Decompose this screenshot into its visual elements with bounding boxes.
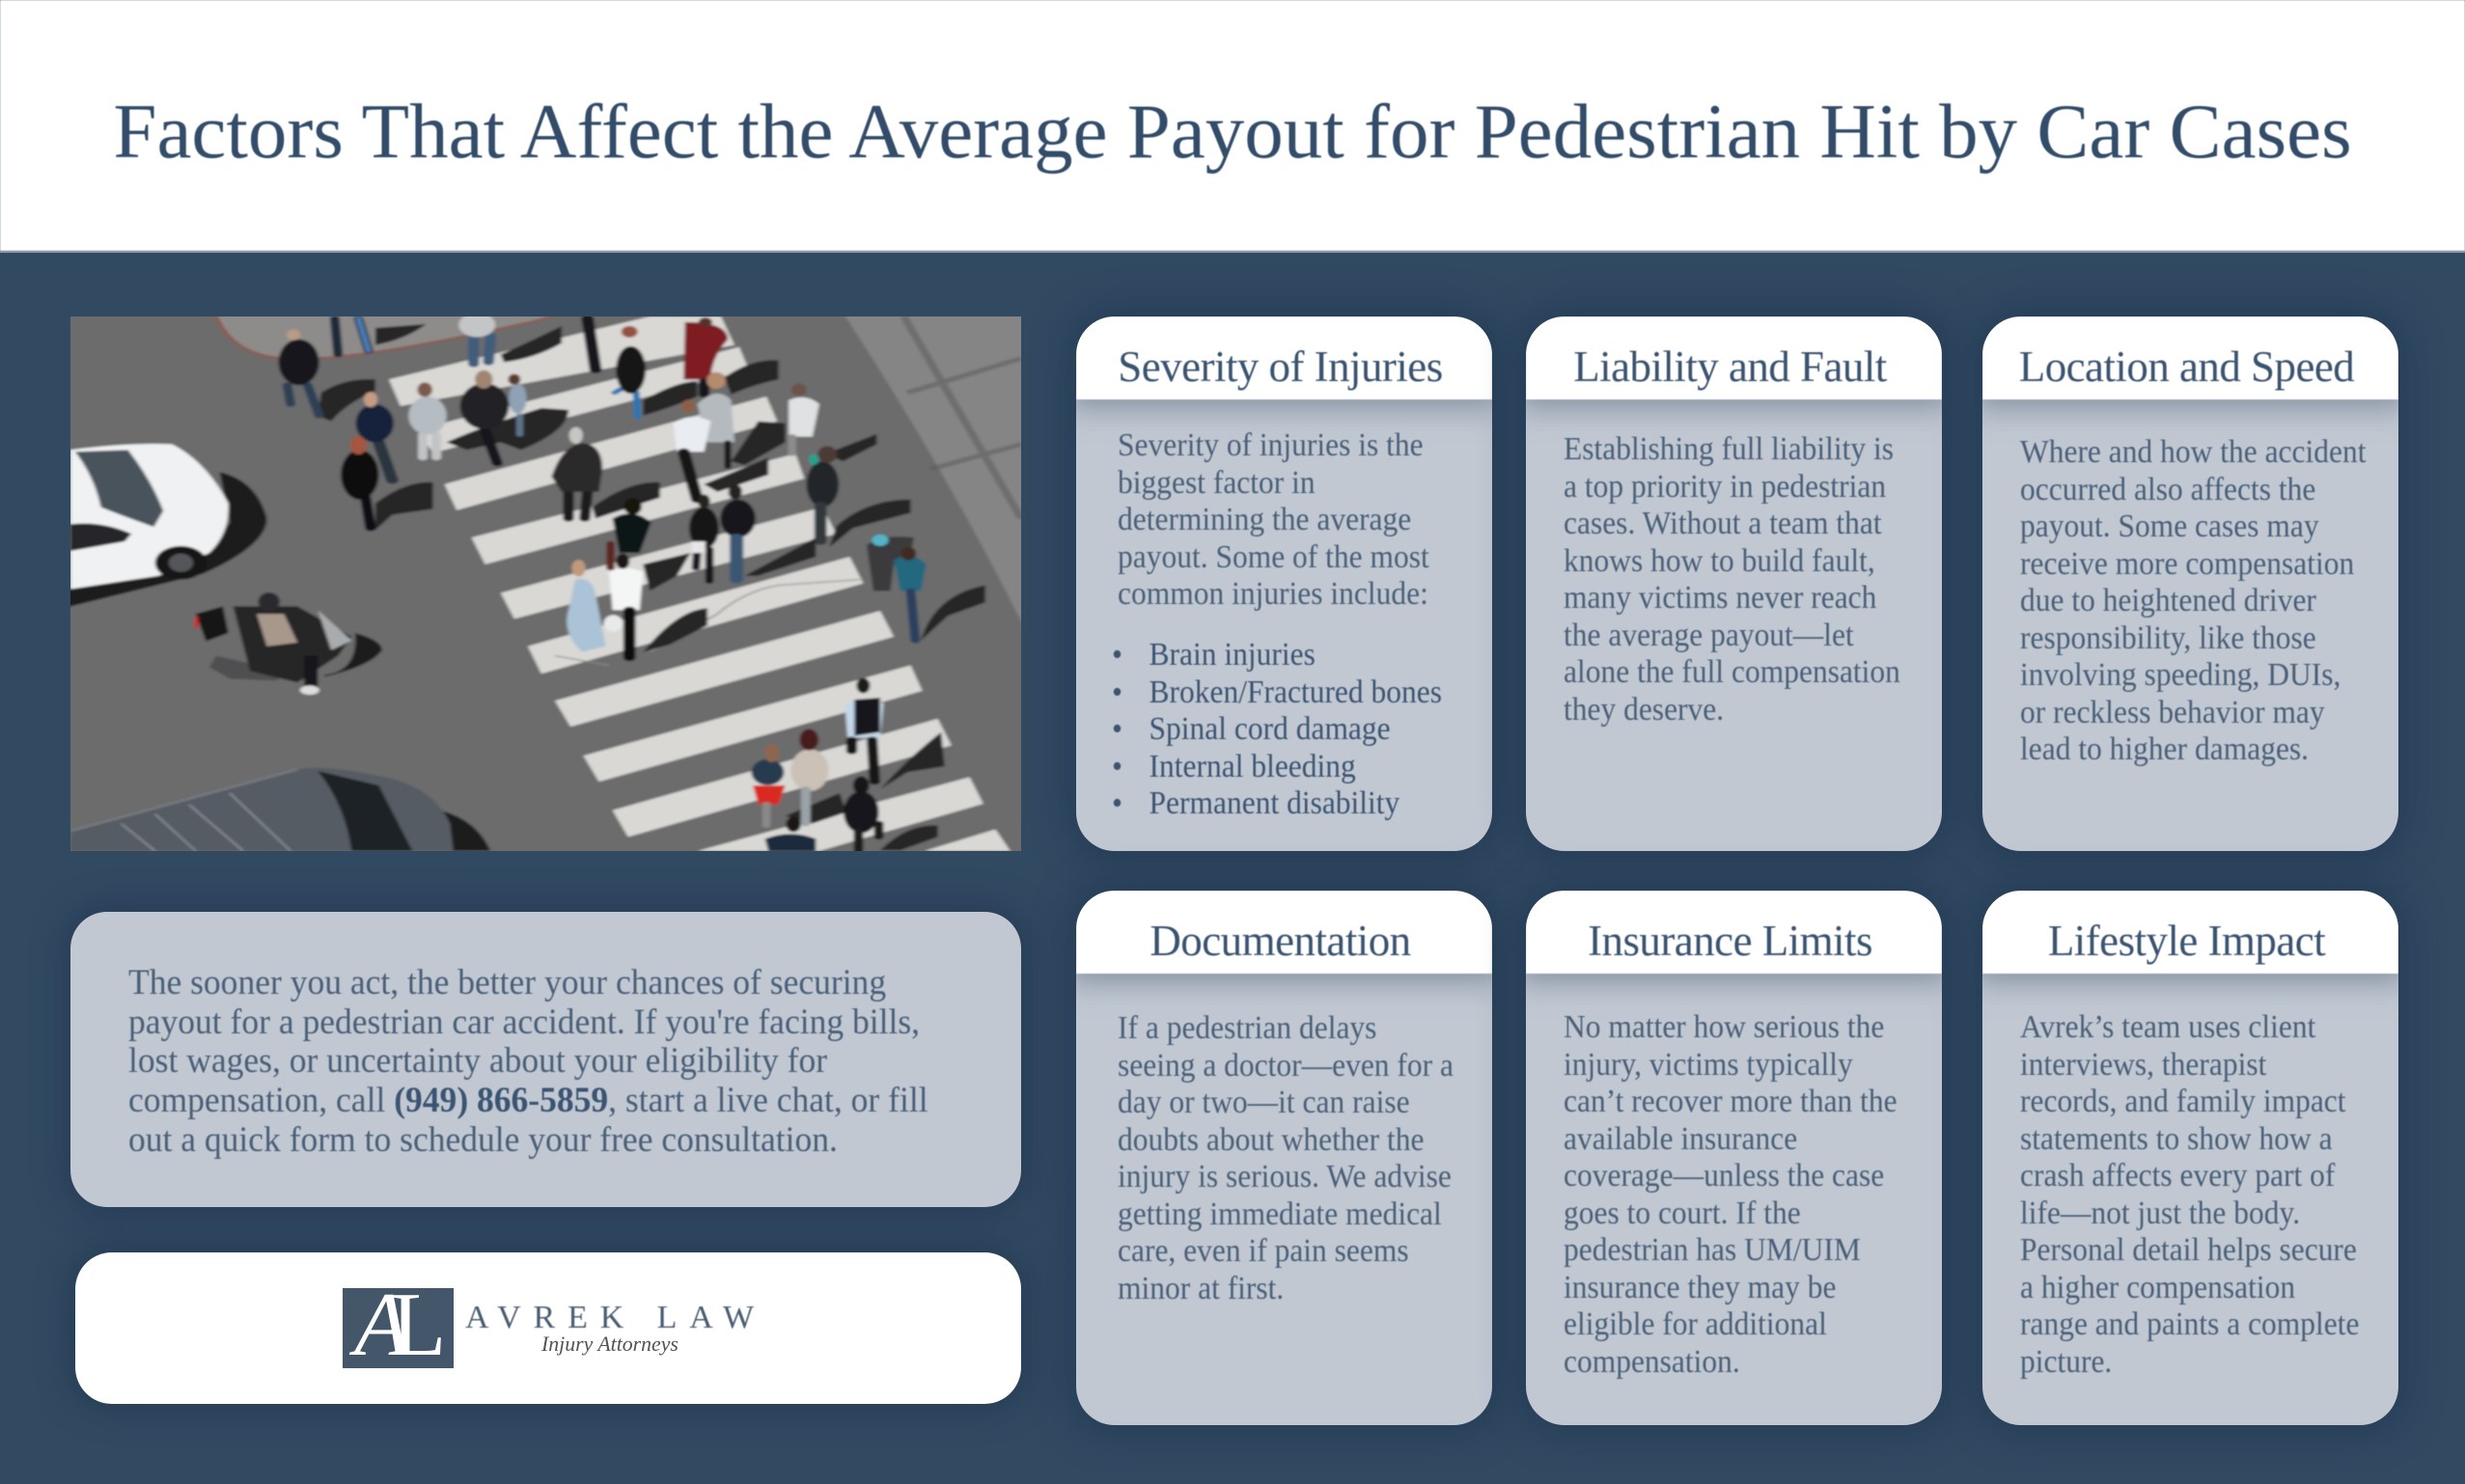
heading: Location and Speed [2019,343,2354,391]
body text: care, even if pain seems [1118,1233,1409,1269]
injury list: • [1112,673,1122,710]
body text: cases. Without a team that [1564,506,1882,541]
body text: statements to show how a [2020,1121,2333,1156]
body text: injury is serious. We advise [1118,1159,1452,1195]
body text: picture. [2020,1343,2112,1380]
body text: eligible for additional [1564,1306,1827,1342]
body text: life—not just the body. [2020,1195,2300,1231]
body text: lead to higher damages. [2020,731,2309,767]
body text: determining the average [1118,502,1411,537]
body text: payout. Some of the most [1118,538,1429,575]
body text: Where and how the accident [2020,434,2366,470]
injury list: • [1112,749,1122,783]
body text: Personal detail helps secure [2020,1232,2357,1268]
call to action text: lost wages, or uncertainty about your eligibility for [128,1041,827,1081]
heading: Documentation [1149,917,1411,965]
injury list [1112,637,1442,821]
body text: common injuries include: [1118,576,1428,612]
injury list: • [1112,711,1122,747]
body text: coverage—unless the case [1564,1158,1884,1194]
body text: doubts about whether the [1118,1121,1424,1158]
body text [2019,434,2367,767]
body text: If a pedestrian delays [1118,1010,1376,1046]
body text: receive more compensation [2020,546,2354,581]
body text: minor at first. [1118,1270,1284,1306]
title [0,0,2465,251]
body text: range and paints a complete [2020,1306,2360,1342]
logo: monogram square [343,1288,454,1368]
panel: severity of injuries [1076,316,1492,851]
heading: Liability and Fault [1573,343,1887,391]
call to action text: payout for a pedestrian car accident. If you're facing bills, [128,1003,920,1042]
road surface [64,313,1028,855]
call to action text [128,963,928,1160]
body text: a top priority in pedestrian [1564,469,1886,504]
body text: alone the full compensation [1564,654,1900,690]
logo: wordmark: AVREK LAW [465,1300,766,1335]
call to action panel [70,912,1021,1207]
heading: Severity of Injuries [1118,343,1443,391]
body text [1118,1010,1454,1306]
body text [2019,1009,2360,1380]
body text: a higher compensation [2020,1270,2295,1305]
heading [1526,891,1942,974]
heading: Lifestyle Impact [2048,917,2325,965]
title: Factors That Affect the Average Payout for Pedestrian Hit by Car Cases [113,88,2352,175]
logo panel [75,1252,1021,1404]
injury list: Spinal cord damage [1149,711,1391,747]
photo: aerial crosswalk with pedestrians and vehicles [70,316,1021,851]
body text: compensation. [1564,1343,1740,1380]
motorcycle and rider [194,592,382,695]
body text: due to heightened driver [2020,583,2316,618]
body text: responsibility, like those [2020,619,2316,656]
body text: knows how to build fault, [1564,542,1875,579]
injury list: Internal bleeding [1149,749,1356,783]
call to action text: out a quick form to schedule your free consultation. [128,1120,838,1160]
body text: Avrek’s team uses client [2020,1009,2315,1045]
body text: crash affects every part of [2020,1158,2335,1194]
pedestrians [279,313,927,851]
heading [1076,891,1492,974]
body text [1118,427,1430,612]
body text: day or two—it can raise [1118,1085,1410,1120]
panel: insurance limits [1526,891,1942,1425]
injury list: • [1112,637,1122,673]
injury list: Brain injuries [1149,637,1316,673]
panel: documentation [1076,891,1492,1425]
crosswalk stripes [389,316,1011,851]
heading [1526,316,1942,399]
body text: many victims never reach [1564,580,1876,616]
body text: involving speeding, DUIs, [2020,657,2340,693]
body text: getting immediate medical [1118,1196,1442,1231]
shadows [318,324,985,850]
panel: liability and fault [1526,316,1942,851]
body text: Severity of injuries is the [1118,427,1424,463]
body text: goes to court. If the [1564,1195,1801,1231]
dark van [70,768,490,851]
white car [64,444,267,608]
body text: or reckless behavior may [2020,695,2325,729]
body text: Establishing full liability is [1564,431,1894,467]
body text: payout. Some cases may [2020,508,2319,544]
body text: injury, victims typically [1564,1046,1853,1083]
injury list: • [1112,785,1122,821]
heading [1982,891,2398,974]
body text: can’t recover more than the [1564,1084,1897,1119]
body text: interviews, therapist [2020,1046,2266,1083]
heading: Insurance Limits [1588,917,1872,965]
body text: occurred also affects the [2020,471,2315,508]
body text: available insurance [1564,1121,1797,1156]
body text [1564,1009,1897,1380]
body text: biggest factor in [1118,465,1316,500]
body text [1564,431,1900,728]
injury list: Permanent disability [1149,785,1399,821]
body text: insurance they may be [1564,1270,1836,1305]
body text: pedestrian has UM/UIM [1564,1232,1861,1268]
heading [1076,316,1492,399]
panel: lifestyle impact [1982,891,2398,1425]
body text: the average payout—let [1564,618,1854,652]
call to action text: compensation, call (949) 866-5859, start a live chat, or fill [128,1081,928,1120]
injury list: Broken/Fractured bones [1149,673,1442,710]
logo: tagline: Injury Attorneys [541,1333,679,1356]
body text: seeing a doctor—even for a [1118,1048,1454,1083]
body text: they deserve. [1564,691,1724,728]
body text: No matter how serious the [1564,1009,1884,1045]
body text: records, and family impact [2020,1084,2346,1119]
call to action text: The sooner you act, the better your chances of securing [128,963,886,1003]
heading [1982,316,2398,399]
panel: location and speed [1982,316,2398,851]
